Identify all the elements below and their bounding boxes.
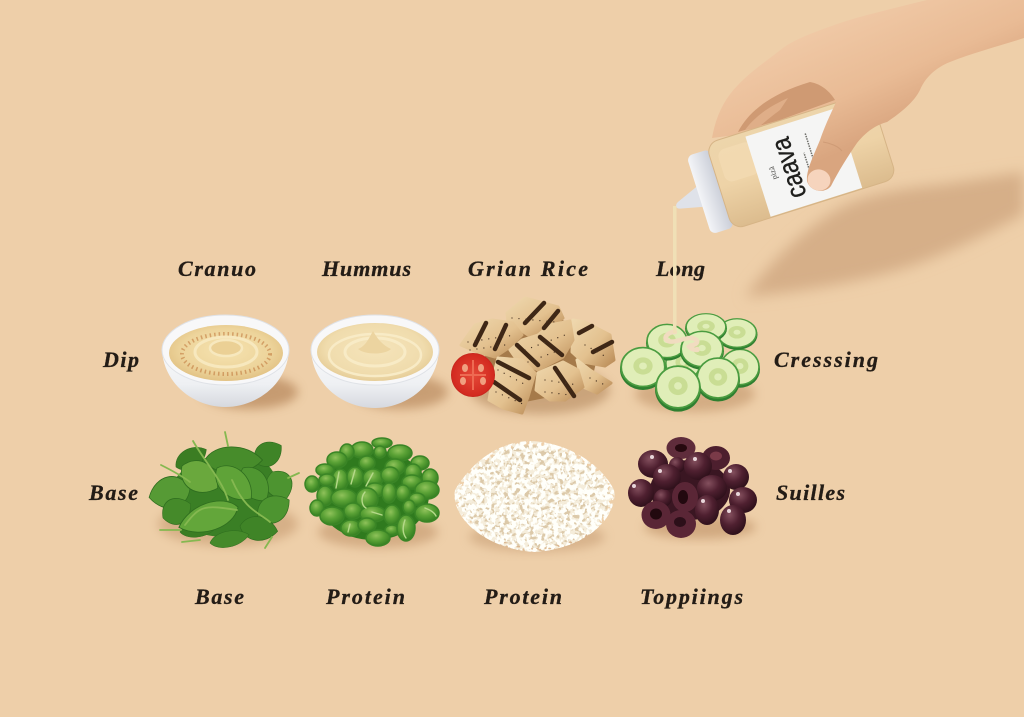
label: Long: Long [655,256,705,281]
label: Hummus: Hummus [321,256,411,281]
small label lines [798,133,822,189]
label: Dip: Dip [102,347,139,372]
grill marks [475,303,612,400]
brand name: caava [765,133,812,202]
olives whole [628,450,757,535]
bottle and hand cast shadow [745,172,1024,297]
olive ring back [666,437,696,459]
bowl of dip with spice [162,315,298,409]
cucumber slices with sauce [620,314,760,412]
label: bottom Protein two: Protein [483,584,562,609]
label: Toppiings: Toppiings [640,584,743,609]
label: bottom Base: Base [194,584,244,609]
squeeze bottle [661,92,897,244]
bottle label [745,108,862,217]
hand fingers and arm behind bottle [712,0,1024,138]
chicken pieces [461,298,614,413]
poured dressing stream [673,206,676,333]
rice mound [455,441,614,552]
label: side Base: Base [88,480,138,505]
row labels and column labels [88,256,878,609]
label: bottom Protein one: Protein [325,584,405,609]
olive highlights [632,455,740,513]
pod ridges [336,470,436,538]
small brand mark: pizä [767,165,779,181]
label: Grian Rice: Grian Rice [468,256,588,281]
label: Cranuo: Cranuo [178,256,256,281]
nozzle [671,181,711,216]
label: Suilles: Suilles [776,480,845,505]
black olives [628,437,757,539]
edamame pile [305,438,439,548]
olive ring right [702,446,730,470]
palm and thumb with nail [805,70,908,193]
spinach leaves [146,432,299,551]
grilled chicken with tomato [451,298,614,414]
label: Cresssing: Cresssing [774,347,878,372]
olive rings front [642,482,698,538]
finger gap [738,82,835,132]
spinach stems and ribs [160,432,299,548]
tomato slice [451,353,495,397]
bottle body [706,92,897,230]
pepper specks [468,318,608,405]
bowl of hummus [311,315,448,409]
bottle cap [687,149,734,234]
sauce drizzle [666,332,698,350]
